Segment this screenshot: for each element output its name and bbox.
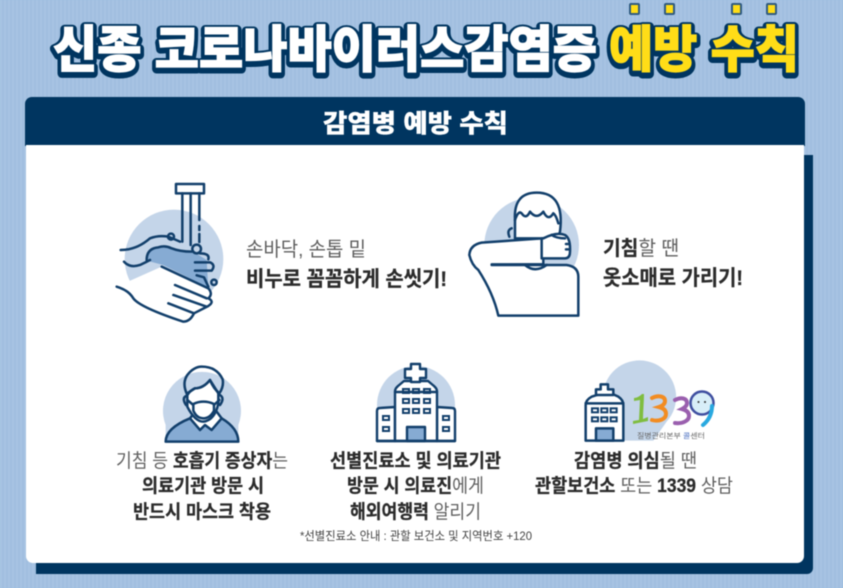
- 1339 text: 관할보건소 또는 1339 상담: [535, 475, 733, 497]
- cough text: 옷소매로 가리기!: [603, 267, 743, 290]
- panel header: [25, 97, 805, 146]
- title: 신종 코로나바이러스감염증: [53, 24, 597, 80]
- title: 예방 수칙: [609, 24, 799, 80]
- footnote: *선별진료소 안내 : 관할 보건소 및 지역번호 +120: [300, 529, 532, 543]
- panel: prevention rules: [25, 97, 813, 574]
- icon: coughing into sleeve: [469, 193, 579, 316]
- cough text: 기침할 땐: [603, 237, 679, 260]
- icon: person wearing mask: [163, 367, 241, 442]
- panel shadow: [36, 155, 813, 574]
- title: 신종 코로나바이러스감염증: [53, 22, 597, 78]
- symptom text: 반드시 마스크 착용: [133, 501, 271, 523]
- panel body: [26, 145, 804, 563]
- icon: 1339 call center: [586, 360, 676, 441]
- wash text: 손바닥, 손톱 밑: [246, 238, 366, 261]
- symptom text: 의료기관 방문 시: [142, 475, 264, 497]
- clinic text: 선별진료소 및 의료기관: [330, 450, 501, 472]
- emphasis dots above title: [630, 4, 776, 14]
- wash text: 비누로 꼼꼼하게 손씻기!: [246, 268, 447, 291]
- logo caption: 질병관리본부 콜센터: [637, 431, 705, 440]
- symptom text: 기침 등 호흡기 증상자는: [116, 450, 288, 472]
- title: 예방 수칙: [609, 22, 799, 78]
- panel heading: 감염병 예방 수칙: [323, 110, 508, 138]
- 1339 text: [535, 450, 733, 497]
- 1339 text: 감염병 의심될 땐: [574, 450, 697, 472]
- clinic text: 방문 시 의료진에게: [347, 475, 484, 497]
- symptom text: [116, 450, 288, 523]
- clinic text: [330, 450, 501, 523]
- icon: hospital: [377, 364, 455, 444]
- wash text: [246, 238, 447, 291]
- cough text: [603, 237, 743, 290]
- clinic text: 해외여행력 알리기: [350, 501, 481, 523]
- logo: 1339: [633, 392, 714, 440]
- icon: hand washing: [117, 184, 223, 322]
